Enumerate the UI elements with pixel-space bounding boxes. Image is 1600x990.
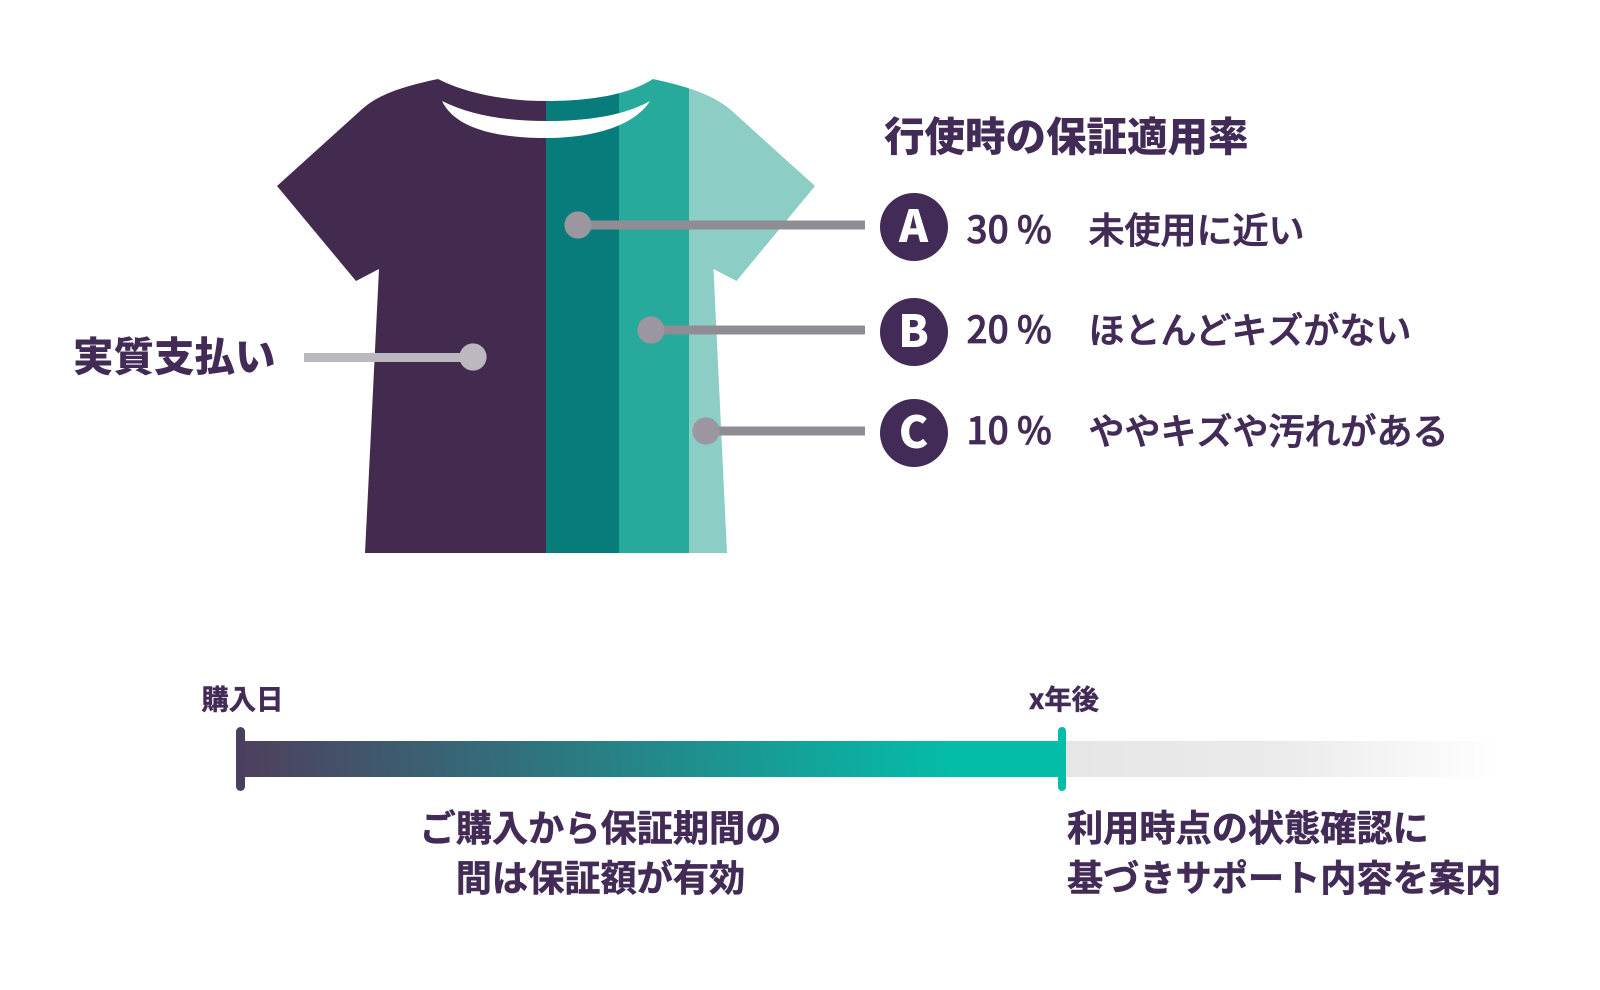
rate row A: 30 % [966, 200, 1052, 254]
rate row C [880, 397, 1449, 467]
timeline bar [236, 727, 1500, 791]
leader line: A [564, 211, 865, 239]
rate row C: 10 % [966, 401, 1052, 455]
timeline label: x years later: x年後 [1029, 677, 1099, 717]
leader line: B [637, 316, 865, 344]
rate row B: B [898, 296, 929, 360]
t-shirt illustration [277, 79, 815, 553]
infographic canvas [74, 79, 1498, 896]
caption: within warranty period: ご購入から保証期間の [420, 800, 781, 852]
rate row B [880, 296, 1411, 366]
caption: after warranty period: 利用時点の状態確認に [1067, 800, 1429, 852]
rate row A: 未使用に近い [1088, 202, 1305, 254]
label: actual payment: 実質支払い [73, 324, 276, 383]
rate row C: ややキズや汚れがある [1088, 403, 1449, 455]
heading: coverage rates: 行使時の保証適用率 [884, 104, 1248, 163]
caption: within warranty period: 間は保証額が有効 [456, 850, 745, 902]
leader line: C [692, 417, 865, 445]
rate row A: A [898, 191, 929, 255]
timeline label: purchase date: 購入日 [202, 677, 283, 717]
caption: after warranty period: 基づきサポート内容を案内 [1067, 850, 1501, 902]
rate row A [880, 191, 1305, 261]
rate row B: 20 % [966, 300, 1052, 354]
rate row C: C [899, 397, 928, 461]
rate row B: ほとんどキズがない [1088, 302, 1411, 354]
caption: within warranty period [420, 800, 781, 902]
leader line: actual payment [304, 343, 487, 371]
caption: after warranty period [1067, 800, 1501, 902]
